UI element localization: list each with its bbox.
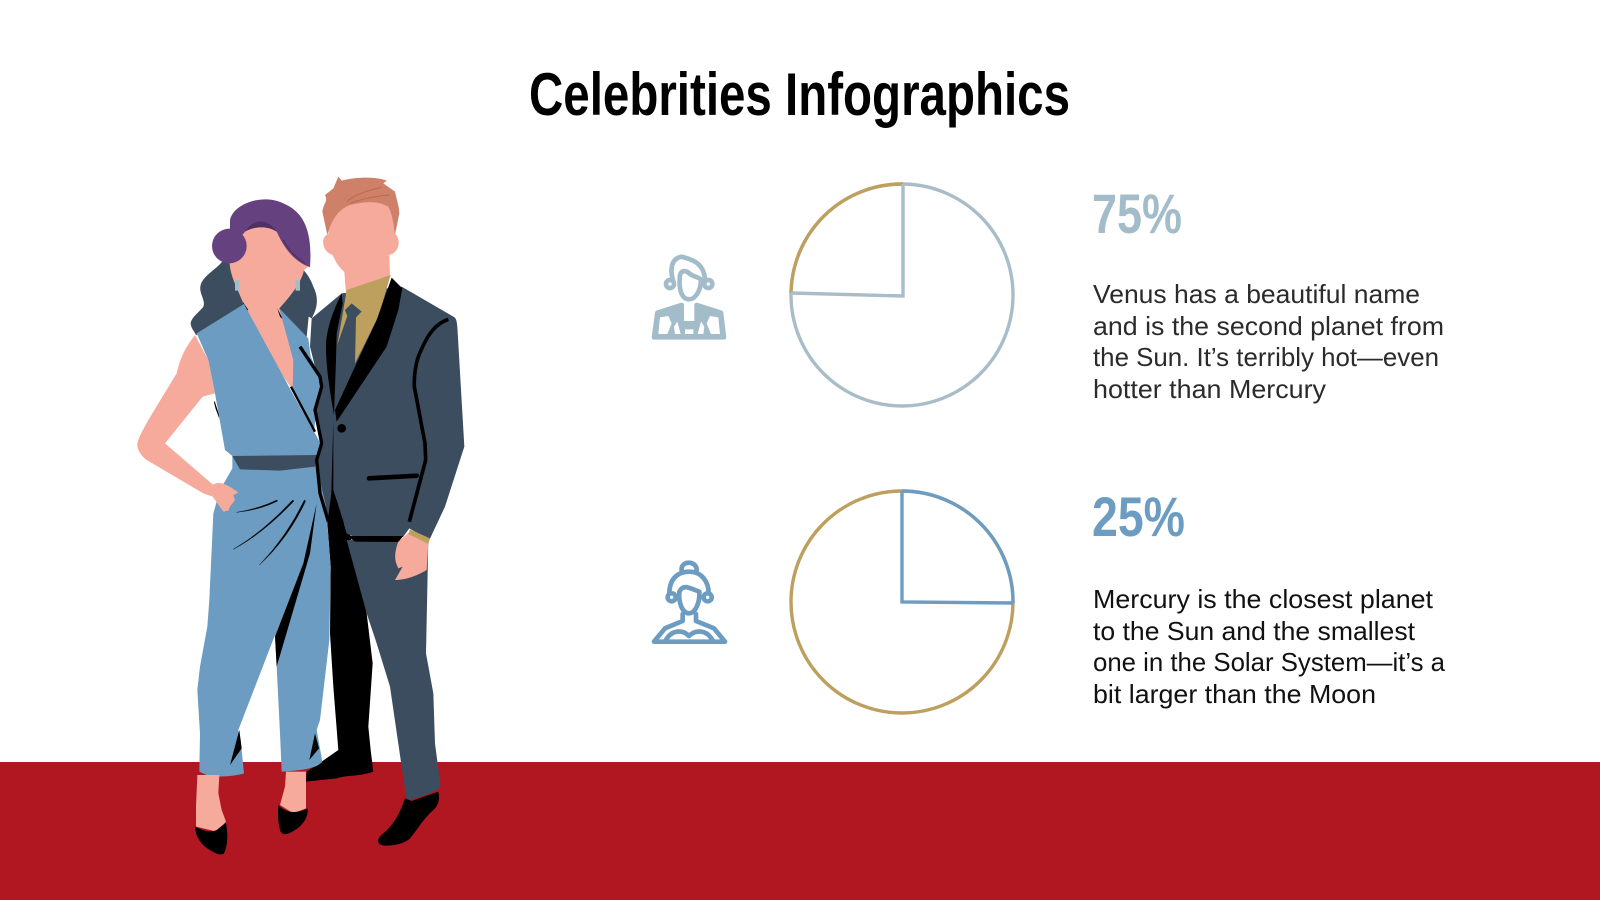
value: 25%: 25% xyxy=(1092,485,1185,548)
icon: man xyxy=(654,257,724,337)
text block: Mercury xyxy=(1093,584,1446,709)
text block: Mercury: Mercury is the closest planet xyxy=(1093,584,1434,614)
title: Celebrities Infographics xyxy=(529,61,1070,128)
text block: Venus: and is the second planet from xyxy=(1093,311,1444,341)
icon: woman xyxy=(654,563,725,642)
pie chart: 75% xyxy=(791,184,1013,406)
text block: Venus: Venus has a beautiful name xyxy=(1093,279,1420,309)
text block: Venus: the Sun. It’s terribly hot—even xyxy=(1093,342,1439,372)
text block: Mercury: bit larger than the Moon xyxy=(1093,679,1376,709)
text block: Venus: hotter than Mercury xyxy=(1093,374,1326,404)
text block: Venus xyxy=(1093,279,1444,404)
pie chart: 25% xyxy=(791,491,1013,713)
value: 75%: 75% xyxy=(1092,182,1182,245)
illustration: celebrity couple xyxy=(137,177,464,854)
text block: Mercury: one in the Solar System—it’s a xyxy=(1093,647,1446,677)
red carpet band xyxy=(0,762,1600,900)
text block: Mercury: to the Sun and the smallest xyxy=(1093,616,1416,646)
